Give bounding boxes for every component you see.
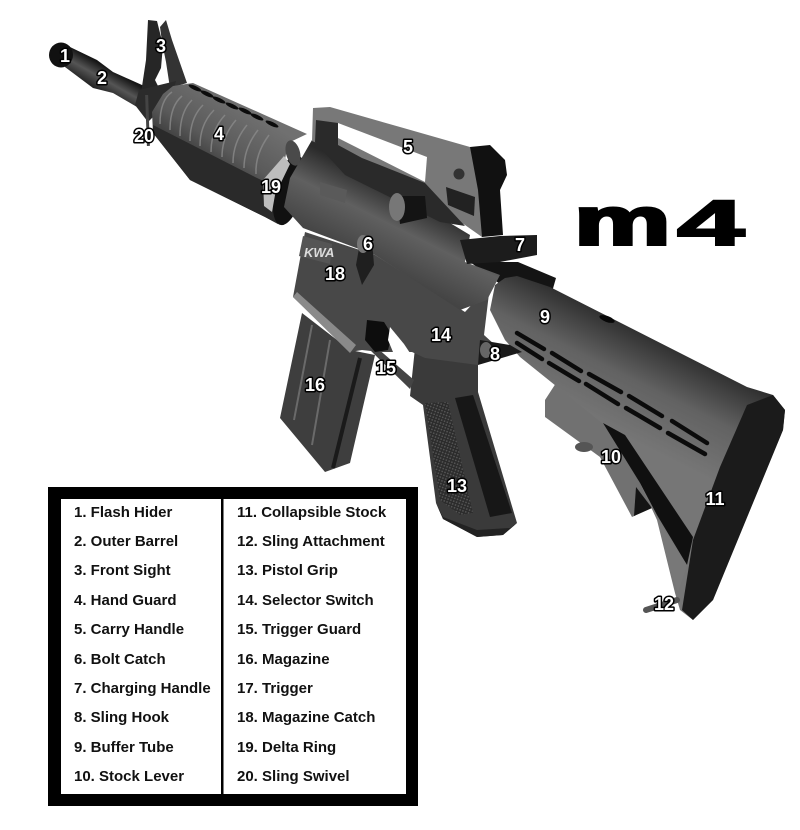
callout 16: 16 — [305, 375, 325, 395]
legend column 2: 20. Sling Swivel — [237, 768, 350, 785]
callout 8: 8 — [490, 344, 500, 364]
front sight — [135, 20, 187, 146]
buffer tube and collapsible stock — [490, 276, 785, 620]
delta ring — [263, 139, 311, 228]
carry handle — [312, 107, 492, 237]
callout 7: 7 — [515, 235, 525, 255]
rifle photograph — [49, 20, 785, 620]
callout 3: 3 — [156, 36, 166, 56]
callout 1: 1 — [60, 46, 70, 66]
callout 13: 13 — [447, 476, 467, 496]
legend column 1: 7. Charging Handle — [74, 680, 211, 697]
title: M4 logo: 4 — [677, 187, 745, 259]
callout 2: 2 — [97, 68, 107, 88]
legend column 2: 13. Pistol Grip — [237, 562, 338, 579]
legend column 2: 12. Sling Attachment — [237, 533, 385, 550]
legend column 2: 17. Trigger — [237, 680, 313, 697]
upper receiver — [284, 140, 500, 310]
ejection port cover — [320, 182, 347, 203]
panel: parts legend — [48, 487, 418, 806]
callout 19: 19 — [261, 177, 281, 197]
legend column 2: 18. Magazine Catch — [237, 709, 375, 726]
legend column 2: 15. Trigger Guard — [237, 621, 361, 638]
hand guard — [152, 83, 307, 224]
magazine catch markings — [299, 235, 374, 285]
pistol grip — [410, 348, 517, 537]
callout 5: 5 — [403, 137, 413, 157]
legend column 2: 11. Collapsible Stock — [237, 504, 387, 521]
title: M4 logo — [574, 184, 745, 259]
callout 12: 12 — [654, 594, 674, 614]
callout 6: 6 — [363, 234, 373, 254]
takedown knob — [389, 193, 427, 224]
legend column 2 — [237, 504, 387, 785]
legend column 1: 4. Hand Guard — [74, 592, 177, 609]
legend column 1 — [74, 504, 211, 785]
title: M4 logo: m — [574, 184, 671, 259]
lower receiver — [293, 232, 522, 389]
legend column 1: 2. Outer Barrel — [74, 533, 178, 550]
legend column 1: 10. Stock Lever — [74, 768, 184, 785]
callout 10: 10 — [601, 447, 621, 467]
part number callouts — [60, 36, 725, 614]
callout 20: 20 — [134, 126, 154, 146]
callout 9: 9 — [540, 307, 550, 327]
sling attachment — [646, 600, 677, 610]
callout 14: 14 — [431, 325, 451, 345]
callout 15: 15 — [376, 358, 396, 378]
callout 11: 11 — [705, 489, 725, 509]
legend column 1: 3. Front Sight — [74, 562, 171, 579]
legend column 2: 14. Selector Switch — [237, 592, 374, 609]
rear sight — [470, 145, 507, 237]
stock slots — [517, 333, 707, 454]
magazine catch markings: KWA — [304, 245, 334, 260]
legend column 1: 9. Buffer Tube — [74, 739, 174, 756]
legend column 2: 19. Delta Ring — [237, 739, 336, 756]
callout 4: 4 — [214, 124, 224, 144]
receiver extension collar — [470, 262, 556, 292]
callout 18: 18 — [325, 264, 345, 284]
legend column 2: 16. Magazine — [237, 651, 330, 668]
legend column 1: 8. Sling Hook — [74, 709, 170, 726]
legend column 1: 6. Bolt Catch — [74, 651, 166, 668]
magazine — [280, 313, 375, 472]
legend column 1: 5. Carry Handle — [74, 621, 184, 638]
butt plate — [682, 395, 785, 620]
legend column 1: 1. Flash Hider — [74, 504, 173, 521]
stock lever — [545, 380, 652, 517]
outer barrel — [65, 47, 160, 112]
flash hider — [49, 42, 73, 68]
charging handle — [460, 235, 537, 264]
